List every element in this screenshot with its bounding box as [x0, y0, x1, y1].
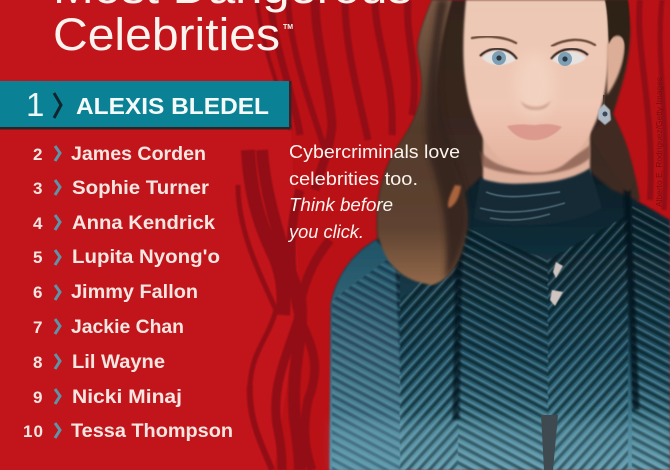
rank 9: Nicki Minaj — [72, 386, 182, 408]
rank 6: Jimmy Fallon — [71, 281, 198, 303]
callout — [287, 142, 460, 242]
rank 5: Lupita Nyong'o — [72, 246, 220, 268]
rank 8: Lil Wayne — [72, 351, 165, 373]
collar sheen — [480, 192, 565, 220]
rank 4: Anna Kendrick — [72, 212, 215, 234]
photo credit: Alberto E. Rodriguez/Getty Images — [654, 77, 664, 207]
seams — [456, 190, 636, 420]
nose — [520, 99, 552, 110]
curtain — [238, 0, 670, 470]
rank 4: 4 — [33, 214, 43, 233]
front hair lock — [377, 0, 467, 285]
jacket texture — [332, 205, 670, 470]
rank 9: 9 — [33, 388, 42, 407]
rank 10: Tessa Thompson — [71, 420, 233, 442]
number one banner — [0, 81, 292, 130]
rank 3: Sophie Turner — [72, 177, 209, 199]
rank 3: 3 — [33, 179, 42, 198]
copper hair highlight — [448, 185, 461, 208]
rank 2: James Corden — [71, 143, 206, 165]
earring — [598, 95, 611, 125]
title: Celebrities — [53, 9, 280, 60]
rank 9 — [33, 386, 182, 408]
rank 5: 5 — [33, 248, 42, 267]
number one banner: ALEXIS BLEDEL — [76, 93, 269, 119]
eyebrows — [472, 37, 595, 46]
rank 10: 10 — [23, 422, 43, 441]
number one banner: 1 — [26, 86, 44, 123]
title: TM — [283, 24, 293, 31]
rank 8: 8 — [33, 353, 42, 372]
rank 7: 7 — [33, 318, 42, 337]
dark chevron — [54, 93, 61, 118]
rank 8 — [33, 351, 165, 373]
rank 7: Jackie Chan — [71, 316, 184, 338]
rank 6: 6 — [33, 283, 42, 302]
neck — [483, 120, 590, 187]
rank 2: 2 — [33, 145, 42, 164]
callout: Cybercriminals love — [289, 142, 460, 162]
jacket — [330, 172, 670, 470]
hair shadow beside face — [426, 0, 468, 280]
face — [463, 0, 625, 172]
callout: celebrities too. — [289, 169, 418, 189]
lighter fur at hem — [331, 420, 670, 470]
callout: you click. — [287, 222, 364, 242]
center opening — [541, 415, 558, 470]
lips — [507, 124, 562, 140]
callout: Think before — [289, 195, 393, 215]
neck shadow — [480, 145, 590, 175]
title — [53, 0, 412, 60]
right hair top — [605, 0, 630, 85]
eyes — [480, 49, 588, 66]
right hair lock — [590, 112, 634, 192]
ear — [607, 36, 625, 95]
cheek shading — [515, 53, 555, 117]
ranked list — [23, 143, 233, 442]
hair back — [377, 0, 640, 288]
collar — [474, 168, 602, 225]
sleeve — [330, 240, 405, 470]
